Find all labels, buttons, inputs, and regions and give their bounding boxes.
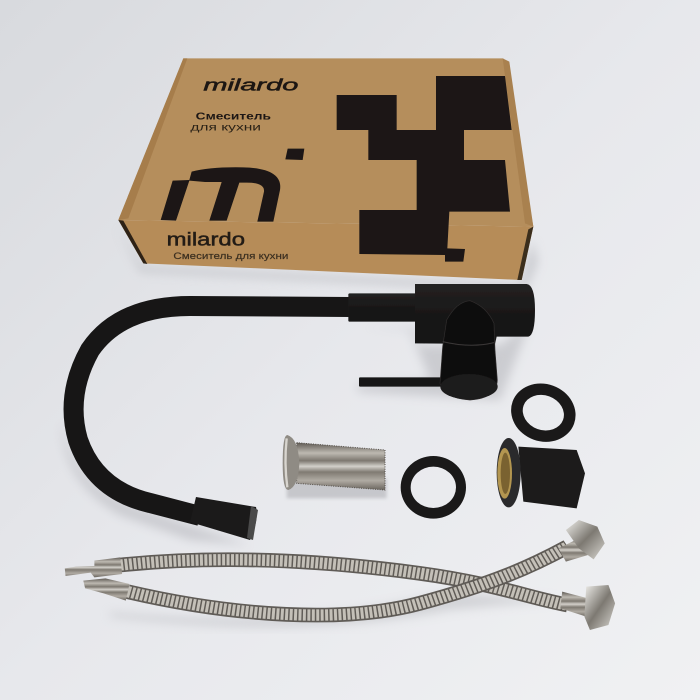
mounting nut: [497, 438, 585, 508]
gasket ring upper: [503, 375, 584, 451]
box shadow: [118, 226, 538, 292]
cardboard box: [118, 58, 533, 280]
hose two nut: [566, 520, 605, 559]
water hoses: [65, 520, 615, 630]
spout end piece: [190, 497, 258, 540]
brass interior: [501, 453, 510, 494]
hose two braid: [128, 547, 568, 615]
hose one nut: [584, 585, 615, 630]
hose two: [83, 520, 605, 615]
main cylinder: [415, 284, 535, 344]
hose one pipe collar: [560, 592, 588, 617]
nut flange: [497, 438, 521, 507]
sleeve flange: [283, 435, 299, 490]
hose one braid: [120, 560, 568, 605]
hoses shadow: [110, 592, 560, 627]
large m logo: [161, 167, 280, 222]
brand logo top: milardo: [203, 76, 298, 95]
ring body: [503, 375, 584, 451]
nut body: [518, 447, 585, 508]
hose two highlight: [128, 547, 568, 615]
brand logo front: milardo: [167, 229, 245, 250]
hose one highlight: [120, 560, 568, 605]
spout nozzle: [190, 497, 257, 540]
mixer hub: [440, 301, 497, 400]
front right edge: [517, 227, 533, 280]
faucet shadow: [62, 322, 530, 545]
hose one fitting: [65, 557, 122, 577]
left flap: [118, 58, 187, 220]
front left edge: [118, 220, 147, 264]
box top face: [118, 58, 533, 227]
label top regular: для кухни: [190, 122, 261, 133]
sleeve tube: [297, 443, 385, 490]
faucet body: [348, 284, 535, 400]
right flap: [503, 58, 533, 227]
hose one: [65, 557, 615, 630]
black pixel pattern: [337, 76, 512, 262]
label top bold: Смеситель: [196, 111, 271, 122]
threaded sleeve: [283, 435, 387, 498]
hose two fitting: [83, 578, 130, 601]
flexible spout hose: [74, 306, 350, 516]
hub cap: [440, 374, 498, 399]
hub seam: [443, 342, 494, 345]
spout collar: [348, 293, 417, 322]
box front face: [118, 220, 533, 280]
lever handle: [359, 377, 442, 387]
brass insert: [497, 448, 512, 499]
black dot: [285, 149, 304, 160]
flange highlight: [285, 438, 287, 487]
gasket ring lower: [401, 456, 466, 519]
nozzle tip: [247, 506, 258, 540]
sleeve threads: [297, 443, 385, 490]
ring body: [401, 456, 466, 519]
hose two pipe collar: [559, 538, 588, 562]
sleeve shadow: [287, 478, 387, 498]
label front: Смеситель для кухни: [173, 251, 288, 261]
